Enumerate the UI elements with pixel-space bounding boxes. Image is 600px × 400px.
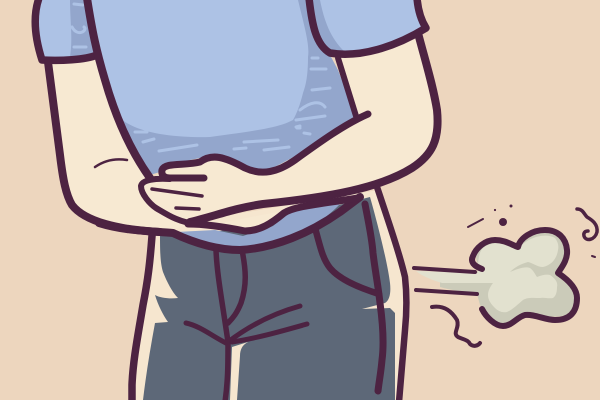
legs skin backing xyxy=(131,190,405,400)
left leg line xyxy=(132,236,152,400)
skin between hand and waist xyxy=(215,212,277,230)
left arm outer line xyxy=(48,62,160,232)
cloud outline xyxy=(472,230,577,326)
right leg inner line xyxy=(365,204,383,391)
right arm and hand skin xyxy=(145,33,436,222)
right arm outer line xyxy=(190,33,438,222)
right sleeve outline xyxy=(309,0,426,54)
left crease xyxy=(186,323,226,343)
elbow crease xyxy=(95,159,127,167)
hand knuckles xyxy=(141,179,196,224)
fly xyxy=(216,250,228,400)
body outlines xyxy=(35,0,438,400)
right leg outer line xyxy=(376,184,406,400)
lower waist line xyxy=(99,197,360,250)
shirt torso xyxy=(88,0,356,175)
cloud shadow body with tail xyxy=(440,232,576,323)
hem upper line xyxy=(188,198,358,231)
shirt hem sliver xyxy=(176,204,340,248)
jeans xyxy=(143,197,395,400)
gas cloud xyxy=(414,204,597,346)
dots xyxy=(499,218,507,226)
small dash left xyxy=(468,219,483,227)
squiggle bottom xyxy=(432,307,480,346)
squiggle top right xyxy=(577,209,597,239)
finger line upper xyxy=(152,189,202,196)
finger line lower xyxy=(176,208,199,209)
pocket xyxy=(315,228,379,294)
right sleeve xyxy=(308,0,426,55)
left sleeve outline xyxy=(35,0,97,60)
torso left line xyxy=(87,0,150,178)
speed line top xyxy=(414,268,475,272)
left sleeve xyxy=(36,0,97,59)
cloud highlight xyxy=(416,236,558,312)
small dash right xyxy=(592,256,595,257)
left arm skin xyxy=(48,56,190,232)
shirt fold marks xyxy=(135,5,330,151)
right arm inner line xyxy=(338,58,356,116)
right creases xyxy=(228,306,300,342)
speed line bottom xyxy=(416,290,477,294)
belly and arm top line xyxy=(162,114,368,178)
